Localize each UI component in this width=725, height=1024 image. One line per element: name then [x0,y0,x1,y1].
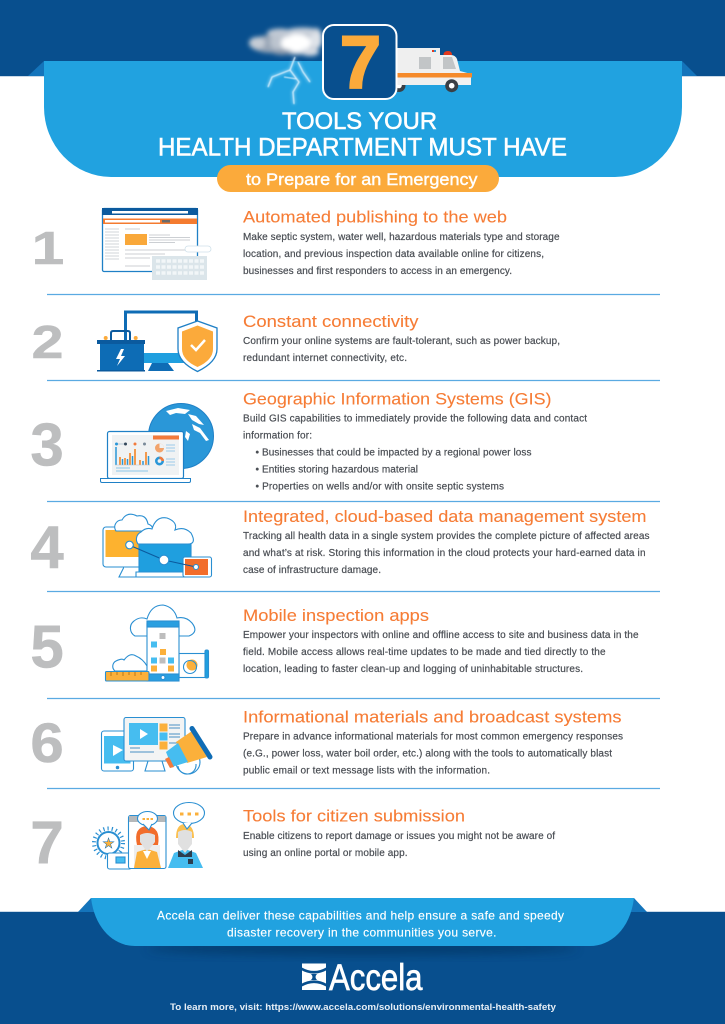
heading: Tools for citizen submission [243,806,465,826]
icon: citizens with speech bubbles [94,802,204,869]
title: HEALTH DEPARTMENT MUST HAVE [158,134,567,162]
logo: Accela: Accela [329,957,423,998]
title [158,108,567,162]
panel: item 7 citizen submission [30,802,555,876]
header panel [44,61,682,177]
header band [0,0,725,77]
footer link: To learn more, visit: https://www.accela.com/solutions/environmental-health-safety [170,1002,557,1013]
body text [243,414,587,492]
heading: Geographic Information Systems (GIS) [243,390,552,408]
number 4: 4 [30,514,64,581]
panel: item 5 mobile inspection apps [30,605,639,681]
body text: field. Mobile access allows real-time updates to be made and tied directly to the [243,647,606,658]
body text: Confirm your online systems are fault-tolerant, such as power backup, [243,336,560,347]
panel: item 6 informational materials [30,708,623,776]
body text: • Entities storing hazardous material [256,464,418,476]
icon: big number 7 badge: 7 [340,21,381,104]
body text: • Properties on wells and/or with onsite septic systems [256,482,504,492]
body text: location, and previous inspection data available online for citizens, [243,249,544,260]
footer band [0,898,725,1024]
icon: cloud connected devices [103,514,212,577]
body text: public email or text message lists with the information. [243,766,490,776]
icon: web page and keyboard [102,208,211,280]
icon: ambulance [392,48,472,92]
body text: (e.G., power loss, water boil order, etc.) along with the tools to automatically blast [243,748,612,760]
number 3: 3 [30,412,64,478]
body text [243,232,560,277]
body text [243,336,560,364]
number 6: 6 [30,713,64,775]
panel: item 1 automated publishing [32,208,560,280]
body text: using an online portal or mobile app. [243,848,408,859]
footer callout: Accela can deliver these capabilities and help ensure a safe and speedy [157,908,564,922]
body text: Build GIS capabilities to immediately provide the following data and contact [243,414,587,424]
heading: Integrated, cloud-based data management system [243,507,646,526]
icon: storm cloud and lightning [249,28,322,104]
panel: item 2 constant connectivity [31,312,560,372]
number 5: 5 [30,614,64,680]
heading: Constant connectivity [243,312,419,331]
heading: Automated publishing to the web [243,208,507,226]
body text: • Businesses that could be impacted by a regional power loss [256,448,532,458]
body text: and what’s at risk. Storing this information in the cloud protects your hard-earned data in [243,548,646,559]
heading: Informational materials and broadcast systems [243,708,622,726]
body text [243,630,639,675]
number 7: 7 [30,809,64,876]
icon: battery, monitor and shield [97,312,217,372]
body text: Make septic system, water well, hazardous materials type and storage [243,232,560,243]
number 1: 1 [32,223,64,275]
subtitle pill: to Prepare for an Emergency [246,170,478,189]
icon: citizens with speech bubbles: ★ [102,835,115,851]
body text: information for: [243,430,312,442]
logo: Accela [301,957,423,998]
icon: laptop and globe [100,404,214,482]
body text [243,732,623,776]
body text: case of infrastructure damage. [243,565,381,576]
subtitle pill [217,165,499,192]
body text: Empower your inspectors with online and offline access to site and business data in the [243,630,639,641]
heading: Mobile inspection apps [243,606,429,625]
title: TOOLS YOUR [282,108,437,135]
panel: item 3 geographic information systems [30,390,587,492]
body text: Tracking all health data in a single system provides the complete picture of affected areas [243,531,650,542]
body text [243,531,650,576]
icon: tablet, monitor and megaphone [102,718,210,774]
panel: item 4 cloud-based data management [30,507,650,581]
body text: location, leading to faster clean-up and logging of uninhabitable structures. [243,664,583,675]
body text: businesses and first responders to access in an emergency. [243,266,512,277]
number 2: 2 [31,317,64,369]
footer callout [91,898,634,946]
body text: redundant internet connectivity, etc. [243,353,407,364]
body text: Enable citizens to report damage or issues you might not be aware of [243,831,555,842]
icon: big number 7 badge [323,21,396,104]
icon: phone, clouds, ruler and map [106,605,208,681]
footer callout: disaster recovery in the communities you serve. [227,926,496,940]
body text: Prepare in advance informational materials for most common emergency responses [243,732,623,742]
body text [243,831,555,859]
